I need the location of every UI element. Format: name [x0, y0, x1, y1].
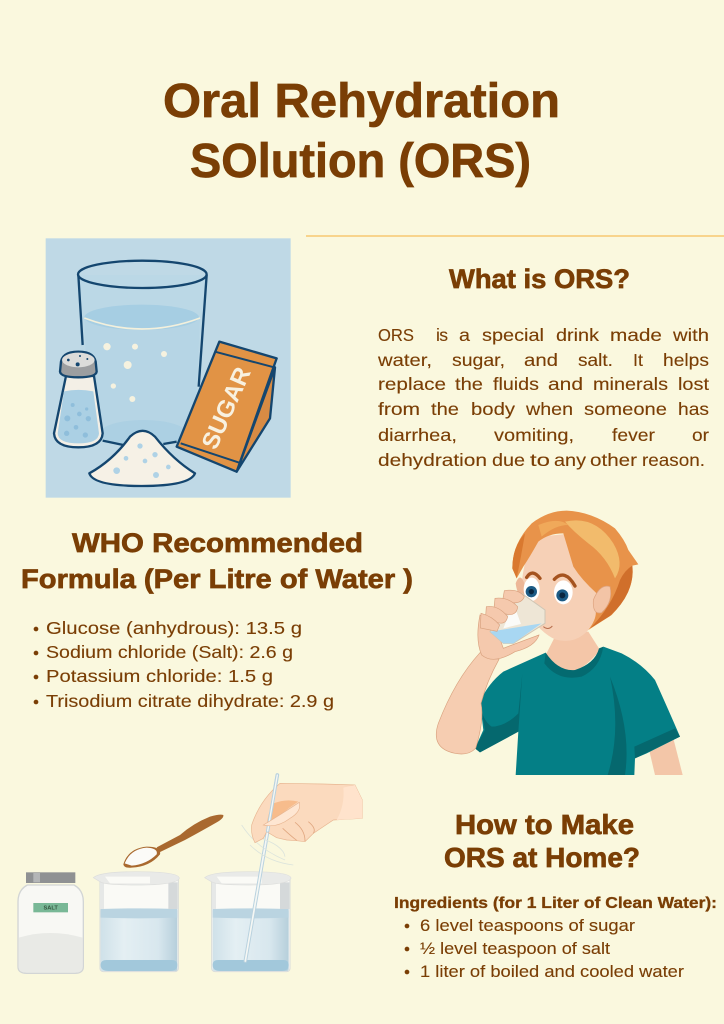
paragraph: what is ORS: and [524, 350, 558, 370]
paragraph: what is ORS: and [548, 374, 583, 394]
heading: WHO recommended formula: Formula (Per Litre of Water ) [21, 564, 413, 594]
paragraph: what is ORS: when [525, 399, 573, 419]
heading: how to make ORS: How to Make [455, 809, 634, 840]
list: formula ingredients: Potassium chloride: 1.5 g [46, 666, 273, 686]
paragraph: what is ORS: is [436, 325, 448, 345]
paragraph: what is ORS: from [378, 399, 420, 419]
illustration: glass, salt shaker, powder and sugar packet [46, 238, 291, 498]
heading: how to make ORS: ORS at Home? [444, 842, 640, 873]
paragraph: what is ORS: body [471, 399, 515, 419]
paragraph: what is ORS: special [482, 325, 544, 345]
heading: WHO recommended formula: WHO Recommended [72, 528, 363, 558]
illustration: boy drinking [436, 511, 683, 775]
list: formula ingredients: Trisodium citrate dihydrate: 2.9 g [46, 691, 334, 711]
paragraph: what is ORS: to [530, 450, 550, 470]
paragraph: what is ORS: water, [377, 350, 432, 370]
list: formula ingredients [34, 618, 334, 711]
beaker with stirring rod [205, 775, 291, 972]
list: home ingredients: 6 level teaspoons of sugar [420, 916, 635, 935]
hand [242, 775, 362, 865]
heading: how to make ORS [444, 809, 640, 873]
paragraph: what is ORS: dehydration [378, 450, 487, 470]
list: formula ingredients: Sodium chloride (Salt): 2.6 g [46, 642, 293, 662]
paragraph: what is ORS: made [610, 325, 662, 345]
list: home ingredients: ½ level teaspoon of salt [420, 939, 610, 958]
list: home ingredients [405, 916, 684, 981]
list: formula ingredients: Glucose (anhydrous): 13.5 g [46, 618, 302, 638]
illustration: salt jar, spoon, beakers and stirring hand [18, 775, 362, 973]
paragraph: what is ORS: a [459, 325, 470, 345]
paragraph: what is ORS: minerals [593, 374, 668, 394]
paragraph: what is ORS: or [692, 425, 709, 445]
paragraph: what is ORS: lost [678, 374, 709, 394]
title [163, 75, 560, 188]
paragraph: what is ORS: other [590, 450, 637, 470]
salt jar: SALT [43, 906, 58, 912]
heading: what is ORS: What is ORS? [449, 264, 630, 294]
paragraph: what is ORS: the [455, 374, 483, 394]
paragraph: what is ORS: diarrhea, [378, 425, 457, 445]
list: home ingredients: 1 liter of boiled and cooled water [420, 962, 684, 981]
paragraph: what is ORS: drink [556, 325, 599, 345]
paragraph: what is ORS: ORS [378, 325, 414, 345]
title: SOlution (ORS) [190, 135, 531, 188]
paragraph: what is ORS: salt. [578, 350, 613, 370]
paragraph: what is ORS: the [431, 399, 459, 419]
paragraph: what is ORS [377, 325, 709, 470]
powder pile [89, 431, 195, 486]
paragraph: what is ORS: any [554, 450, 586, 470]
heading: WHO recommended formula [21, 528, 413, 594]
paragraph: what is ORS: helps [663, 350, 709, 370]
salt jar [18, 872, 83, 973]
beaker with water [93, 872, 179, 972]
paragraph: what is ORS: with [672, 325, 709, 345]
paragraph: what is ORS: reason. [642, 450, 705, 470]
paragraph: what is ORS: due [492, 450, 525, 470]
title: Oral Rehydration [163, 75, 560, 128]
paragraph: what is ORS: It [633, 350, 643, 370]
subheading: ingredients: Ingredients (for 1 Liter of Clean Water): [394, 895, 717, 912]
salt shaker [54, 352, 103, 447]
paragraph: what is ORS: has [678, 399, 709, 419]
sugar packet: SUGAR [197, 363, 257, 453]
ear [593, 586, 611, 613]
spoon [123, 815, 223, 868]
paragraph: what is ORS: sugar, [452, 350, 505, 370]
paragraph: what is ORS: fever [612, 425, 655, 445]
paragraph: what is ORS: replace [378, 374, 446, 394]
sugar packet [177, 342, 277, 472]
paragraph: what is ORS: fluids [493, 374, 539, 394]
paragraph: what is ORS: someone [584, 399, 667, 419]
paragraph: what is ORS: vomiting, [494, 425, 574, 445]
